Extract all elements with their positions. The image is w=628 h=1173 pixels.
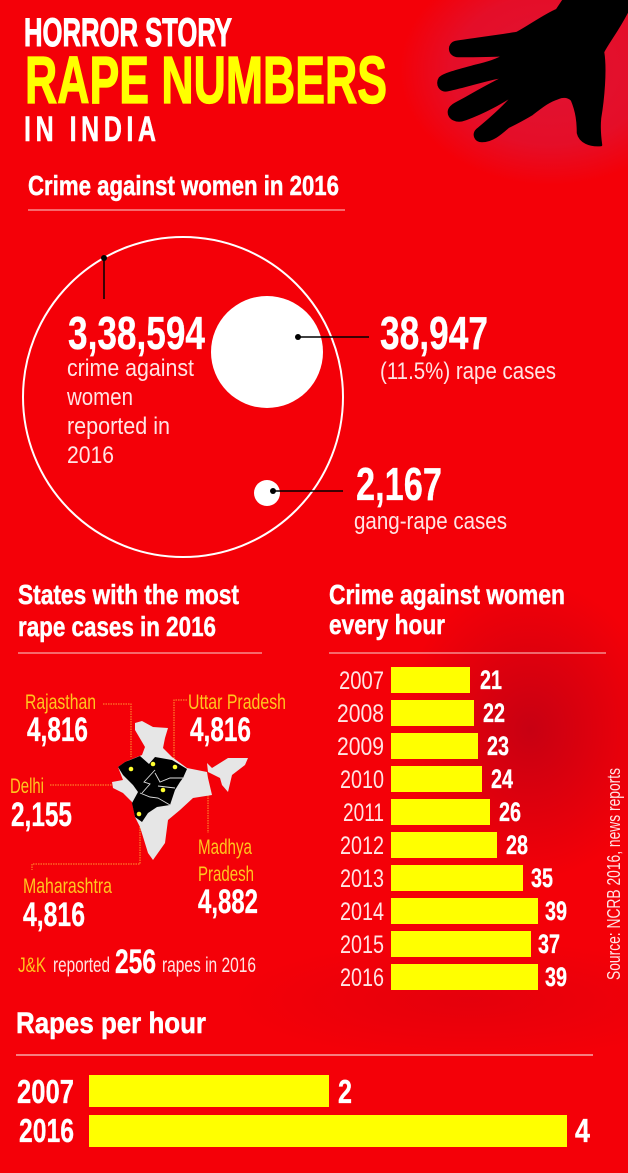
heading: crime against women every hour (329, 579, 565, 640)
bar 2012: 2012 (340, 832, 384, 860)
leader lines (32, 700, 208, 870)
pointer: gang-rape cases (270, 488, 343, 494)
state: Madhya Pradesh (198, 836, 258, 921)
bar 2008: 2008 (337, 700, 384, 728)
bar 2015 (340, 929, 560, 959)
bar 2013 (340, 863, 553, 893)
bar 2013: 2013 (340, 865, 384, 893)
bar 2012 (340, 830, 528, 860)
bar 2007: 2007 (17, 1073, 74, 1110)
bar 2007 (339, 665, 502, 695)
circle: gang-rape cases (254, 480, 280, 506)
stat: rape cases: 38,947 (380, 307, 488, 359)
bar 2007: 2007 (339, 667, 384, 695)
state: Uttar Pradesh: 4,816 (190, 711, 251, 749)
stat: total crime against women: reported in (67, 413, 170, 440)
bar 2012: 28 (506, 830, 528, 860)
stat: total crime against women: women (66, 384, 133, 411)
stat: gang-rape cases: gang-rape cases (354, 508, 507, 535)
bar 2010: 2010 (340, 766, 384, 794)
bar 2016: 4 (575, 1112, 591, 1149)
bar 2011 (343, 797, 521, 827)
stat: gang-rape cases: 2,167 (356, 458, 442, 510)
panel: circle diagram (23, 237, 556, 557)
heading: crime against women every hour: every hour (329, 609, 445, 640)
note: J&amp;K: rapes in 2016 (162, 954, 256, 977)
bar 2014: 39 (545, 896, 567, 926)
heading: states with the most rape cases (18, 579, 239, 642)
bar 2011: 26 (499, 797, 521, 827)
state: Delhi: 2,155 (11, 796, 72, 834)
heading: states with the most rape cases: States with the most (18, 579, 239, 610)
pointer: rape cases (295, 334, 369, 340)
state: Uttar Pradesh (188, 691, 286, 749)
bar chart: rapes per hour (17, 1073, 591, 1149)
note: J&amp;K: J&K (18, 954, 46, 977)
icon: black hand (438, 1, 628, 145)
bar 2008: 22 (483, 698, 505, 728)
bar 2013: 35 (531, 863, 553, 893)
bar 2015: 2015 (340, 931, 384, 959)
stat: gang-rape cases (354, 458, 507, 535)
state: Rajasthan: Rajasthan (25, 691, 96, 714)
stat: total crime against women: 3,38,594 (68, 307, 205, 359)
bar 2008 (337, 698, 505, 728)
stat: total crime against women (66, 307, 205, 469)
stat: rape cases: (11.5%) rape cases (380, 358, 556, 385)
source note: Source: NCRB 2016, news reports (604, 768, 624, 980)
stat: total crime against women: 2016 (67, 442, 114, 469)
bar 2010: 24 (491, 764, 513, 794)
bar 2016: 2016 (19, 1112, 74, 1149)
title (24, 11, 387, 149)
bar 2009 (337, 731, 509, 761)
bar 2007 (17, 1073, 352, 1110)
state: Uttar Pradesh: Uttar Pradesh (188, 691, 286, 714)
bar 2007: 21 (480, 665, 502, 695)
circle: rape cases (211, 296, 323, 408)
bar 2011: 2011 (343, 799, 384, 827)
map: India (112, 721, 248, 860)
bar 2009: 2009 (337, 733, 384, 761)
bar 2016: 39 (545, 962, 567, 992)
bar 2016 (19, 1112, 591, 1149)
state: Madhya Pradesh: Pradesh (198, 863, 254, 886)
bar 2010 (340, 764, 513, 794)
note: J&amp;K: reported (53, 954, 110, 977)
bar 2014: 2014 (340, 898, 384, 926)
title line: In India: IN INDIA (24, 110, 160, 149)
state: Maharashtra (23, 875, 112, 934)
heading: crime against women every hour: Crime against women (329, 579, 565, 610)
title line: Horror Story: HORROR STORY (24, 11, 232, 55)
state: Maharashtra: 4,816 (23, 896, 85, 934)
state: Madhya Pradesh: Madhya (198, 836, 252, 859)
bar chart: crime against women every hour (337, 665, 567, 992)
heading: rapes per hour: Rapes per hour (16, 1007, 206, 1040)
stat: rape cases (380, 307, 556, 385)
pointer: total crime (101, 255, 107, 299)
bar 2016: 2016 (340, 964, 384, 992)
state: Delhi: Delhi (10, 775, 44, 798)
stat: total crime against women: crime against (67, 355, 194, 382)
bar 2016 (340, 962, 567, 992)
state: Delhi (10, 775, 72, 834)
state: Maharashtra: Maharashtra (23, 875, 112, 898)
state: Rajasthan: 4,816 (27, 711, 88, 749)
note: J&amp;K (18, 943, 256, 981)
bar 2007: 2 (338, 1073, 352, 1110)
bar 2009: 23 (487, 731, 509, 761)
title line: Rape Numbers: RAPE NUMBERS (25, 43, 387, 118)
heading: crime against women in 2016: Crime against women in 2016 (28, 170, 339, 201)
outer circle: all crimes (23, 237, 343, 557)
panel: India map with state figures (10, 691, 286, 981)
note: J&amp;K: 256 (115, 943, 156, 981)
bar 2014 (340, 896, 567, 926)
state: Rajasthan (25, 691, 96, 749)
state: Madhya Pradesh: 4,882 (198, 883, 258, 921)
bar 2015: 37 (538, 929, 560, 959)
heading: states with the most rape cases: rape cases in 2016 (18, 611, 216, 642)
